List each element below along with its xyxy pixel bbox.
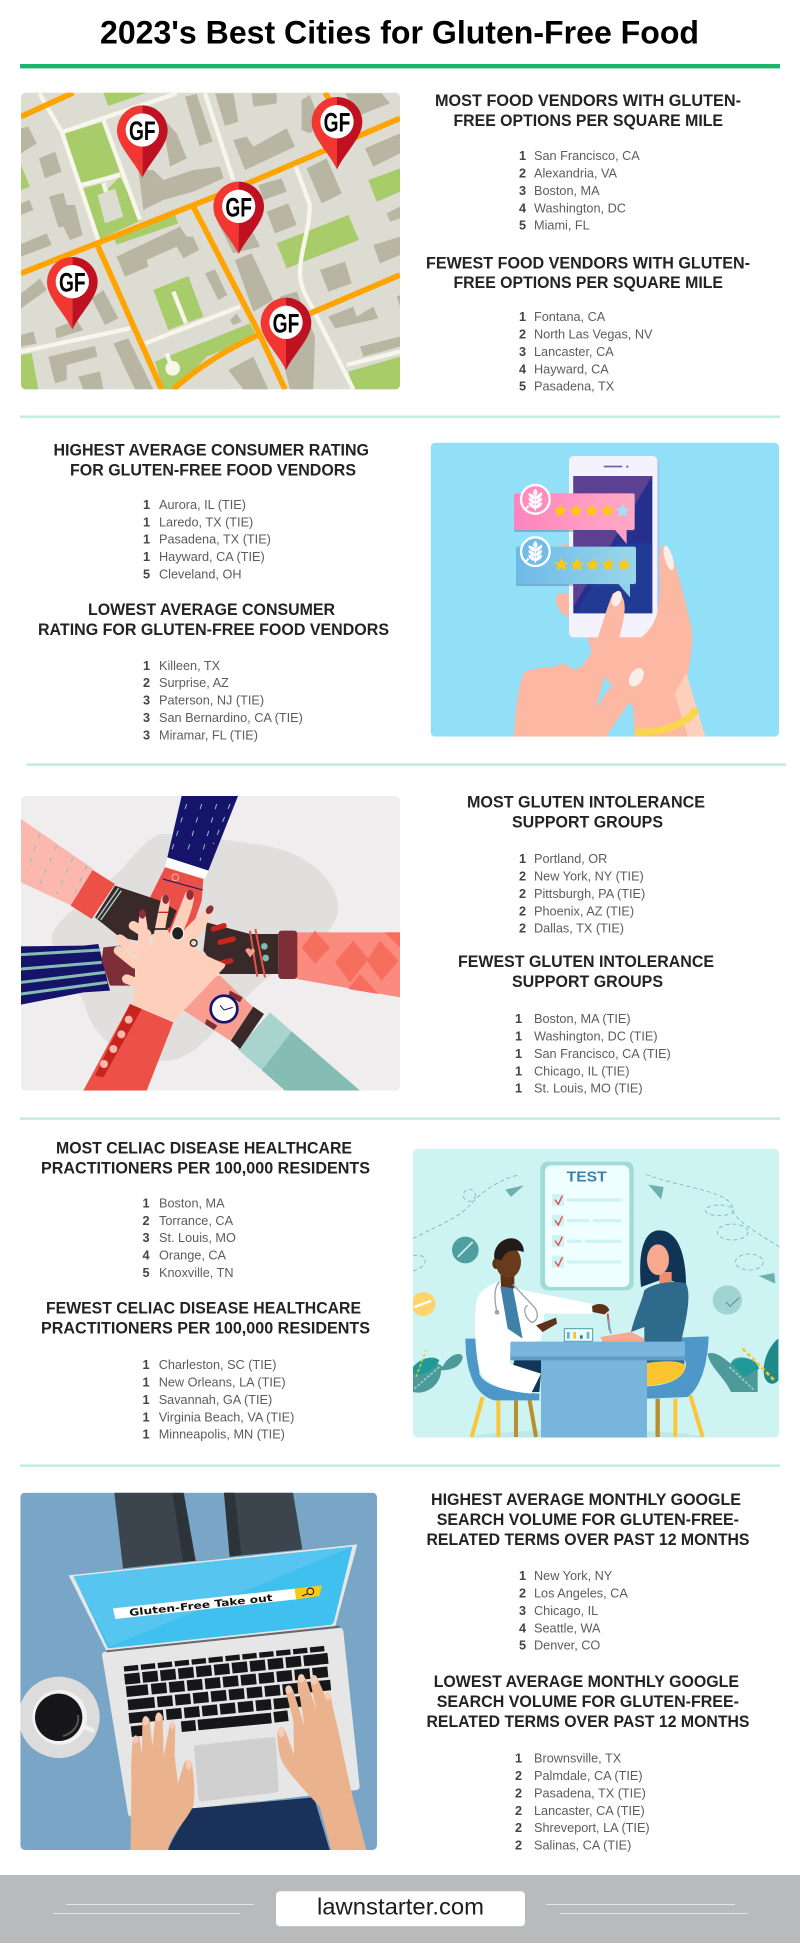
ranking list: 3 — [143, 711, 150, 725]
heading: RELATED TERMS OVER PAST 12 MONTHS — [426, 1531, 750, 1549]
ranking list: Brownsville, TX — [534, 1751, 622, 1765]
ranking list: Miramar, FL (TIE) — [159, 728, 258, 742]
ranking list: 2 — [515, 1769, 522, 1783]
arm: striped navy sleeve — [21, 944, 135, 1005]
heading — [54, 442, 369, 480]
ranking list: 2 — [515, 1838, 522, 1852]
footer logo box: lawnstarter.com — [317, 1894, 484, 1920]
pin 5 — [261, 298, 311, 370]
ranking list: Hayward, CA (TIE) — [159, 550, 265, 564]
ranking list: 1 — [143, 533, 150, 547]
review bubble: five stars — [516, 537, 636, 597]
search bar: Gluten-Free Take out — [129, 1593, 274, 1619]
panel: most vendors — [435, 92, 741, 232]
ranking list: 1 — [142, 1410, 150, 1424]
footer — [0, 1875, 800, 1943]
ranking list — [142, 1197, 236, 1280]
heading: RELATED TERMS OVER PAST 12 MONTHS — [426, 1713, 750, 1731]
heading: MOST FOOD VENDORS WITH GLUTEN- — [435, 92, 741, 110]
ranking list — [519, 1569, 628, 1652]
heading: MOST GLUTEN INTOLERANCE — [467, 793, 705, 811]
heading: PRACTITIONERS PER 100,000 RESIDENTS — [41, 1319, 370, 1337]
ranking list: Knoxville, TN — [159, 1266, 234, 1280]
ranking list: Washington, DC (TIE) — [534, 1029, 658, 1043]
ranking list: 3 — [519, 184, 526, 198]
heading: FOR GLUTEN-FREE FOOD VENDORS — [70, 462, 356, 480]
ranking list: 2 — [143, 676, 150, 690]
arm: pink sleeve — [21, 819, 177, 941]
ranking list: Cleveland, OH — [159, 567, 242, 581]
ranking list: 1 — [143, 498, 150, 512]
ranking list: 1 — [519, 852, 526, 866]
heading — [458, 953, 714, 991]
chair right — [647, 1336, 709, 1437]
ranking list: 1 — [515, 1047, 522, 1061]
ranking list: 4 — [519, 201, 526, 215]
ranking list: Fontana, CA — [534, 310, 606, 324]
pin 3: GF — [225, 192, 252, 222]
ranking list: Hayward, CA — [534, 362, 609, 376]
ranking list: Phoenix, AZ (TIE) — [534, 904, 634, 918]
ranking list: Lancaster, CA — [534, 345, 614, 359]
ranking list: Denver, CO — [534, 1638, 600, 1652]
ranking list: Miami, FL — [534, 218, 590, 232]
heading: RATING FOR GLUTEN-FREE FOOD VENDORS — [38, 621, 389, 639]
ranking list: North Las Vegas, NV — [534, 328, 653, 342]
ranking list: 1 — [519, 149, 526, 163]
ranking list: 3 — [519, 345, 526, 359]
ranking list: 1 — [142, 1427, 150, 1441]
test clipboard — [540, 1162, 634, 1290]
illustration: city map with GF pins — [21, 92, 400, 390]
heading: SUPPORT GROUPS — [512, 813, 663, 831]
icon: check badge — [713, 1285, 742, 1315]
pin 4: GF — [59, 268, 86, 298]
pin 1: GF — [129, 116, 156, 146]
ranking list: Palmdale, CA (TIE) — [534, 1769, 643, 1783]
ranking list: Boston, MA (TIE) — [534, 1012, 631, 1026]
ranking list: Chicago, IL (TIE) — [534, 1064, 629, 1078]
keyboard — [124, 1648, 331, 1732]
ranking list — [519, 852, 645, 936]
panel: highest rating — [54, 442, 369, 581]
ranking list: San Francisco, CA (TIE) — [534, 1047, 671, 1061]
ranking list: Killeen, TX — [159, 659, 221, 673]
holding hand — [587, 545, 705, 737]
ranking list: Salinas, CA (TIE) — [534, 1838, 631, 1852]
ranking list: 2 — [515, 1804, 522, 1818]
title: 2023's Best Cities for Gluten-Free Food — [100, 14, 699, 50]
heading: FREE OPTIONS PER SQUARE MILE — [454, 112, 723, 130]
ranking list: 1 — [143, 659, 150, 673]
ranking list: Shreveport, LA (TIE) — [534, 1821, 650, 1835]
ranking list: 2 — [519, 869, 526, 883]
ranking list: Dallas, TX (TIE) — [534, 922, 624, 936]
ranking list: 1 — [143, 550, 150, 564]
ranking list: Seattle, WA — [534, 1621, 601, 1635]
heading: HIGHEST AVERAGE CONSUMER RATING — [54, 442, 369, 460]
arm: teal sleeve with watch — [182, 976, 360, 1091]
panel: most support groups — [467, 793, 705, 936]
heading: HIGHEST AVERAGE MONTHLY GOOGLE — [431, 1491, 741, 1509]
ranking list: 5 — [143, 567, 150, 581]
ranking list: Washington, DC — [534, 201, 626, 215]
ranking list: Aurora, IL (TIE) — [159, 498, 246, 512]
ranking list: 3 — [143, 728, 150, 742]
arm: salmon sleeve — [203, 922, 400, 997]
heading: SEARCH VOLUME FOR GLUTEN-FREE- — [437, 1693, 739, 1711]
ranking list — [515, 1751, 650, 1852]
heading — [38, 601, 389, 639]
heading: FEWEST GLUTEN INTOLERANCE — [458, 953, 714, 971]
plants — [413, 1339, 778, 1393]
ranking list: 1 — [515, 1029, 522, 1043]
heading: FEWEST FOOD VENDORS WITH GLUTEN- — [426, 254, 750, 272]
heading: PRACTITIONERS PER 100,000 RESIDENTS — [41, 1159, 370, 1177]
ranking list: 3 — [519, 1604, 526, 1618]
test clipboard: TEST — [567, 1170, 607, 1186]
pin 3 — [213, 182, 264, 254]
search bar — [113, 1585, 322, 1619]
ranking list: 2 — [519, 922, 526, 936]
ranking list: Laredo, TX (TIE) — [159, 515, 253, 529]
ranking list — [142, 1358, 294, 1441]
footer logo box — [276, 1891, 525, 1926]
ranking list: 2 — [519, 904, 526, 918]
ranking list: Pasadena, TX (TIE) — [159, 533, 271, 547]
ranking list: Portland, OR — [534, 852, 607, 866]
icon: yellow badge — [411, 1292, 435, 1316]
heading — [467, 793, 705, 831]
ranking list: 1 — [142, 1358, 150, 1372]
ranking list: Paterson, NJ (TIE) — [159, 694, 264, 708]
ranking list: 1 — [519, 310, 526, 324]
illustration: laptop search — [20, 1492, 377, 1850]
pointing hand — [514, 590, 647, 737]
ranking list: Savannah, GA (TIE) — [159, 1393, 272, 1407]
icon: teal badge — [452, 1237, 479, 1263]
panel: lowest search volume — [426, 1673, 750, 1852]
illustration: phone with star reviews — [430, 442, 779, 737]
left hand — [131, 1712, 194, 1850]
ranking list: 1 — [143, 515, 150, 529]
ranking list: 2 — [519, 1586, 526, 1600]
ranking list: 1 — [515, 1751, 522, 1765]
ranking list: San Francisco, CA — [534, 149, 640, 163]
ranking list: 2 — [515, 1821, 522, 1835]
ranking list — [519, 149, 640, 232]
laptop base — [105, 1631, 356, 1813]
arm: navy sleeve top — [148, 796, 238, 934]
phone — [569, 456, 660, 637]
heading — [41, 1300, 370, 1337]
ranking list: 5 — [142, 1266, 150, 1280]
ranking list: Pittsburgh, PA (TIE) — [534, 887, 645, 901]
ranking list: Alexandria, VA — [534, 166, 618, 180]
ranking list: Minneapolis, MN (TIE) — [159, 1427, 285, 1441]
ranking list: Boston, MA — [534, 184, 600, 198]
ranking list: Lancaster, CA (TIE) — [534, 1804, 645, 1818]
heading: FEWEST CELIAC DISEASE HEALTHCARE — [46, 1300, 361, 1318]
pin 5: GF — [273, 308, 299, 338]
heading: FREE OPTIONS PER SQUARE MILE — [454, 274, 723, 292]
heading — [41, 1139, 370, 1177]
ranking list: 2 — [142, 1214, 150, 1228]
ranking list: Torrance, CA — [159, 1214, 234, 1228]
lap — [168, 1797, 330, 1850]
ranking list: St. Louis, MO — [159, 1231, 236, 1245]
ranking list: 5 — [519, 380, 526, 394]
ranking list: 2 — [519, 887, 526, 901]
illustration: doctor and patient — [413, 1149, 780, 1438]
ranking list — [143, 498, 271, 581]
panel: most practitioners — [41, 1139, 370, 1280]
test tube rack — [564, 1329, 593, 1341]
ranking list: New York, NY (TIE) — [534, 869, 644, 883]
ranking list: 1 — [515, 1064, 522, 1078]
illustration: stacked hands — [21, 796, 400, 1091]
ranking list: San Bernardino, CA (TIE) — [159, 711, 303, 725]
ranking list: 2 — [519, 328, 526, 342]
ranking list: St. Louis, MO (TIE) — [534, 1081, 643, 1095]
heading: MOST CELIAC DISEASE HEALTHCARE — [56, 1139, 352, 1157]
ranking list: New Orleans, LA (TIE) — [159, 1375, 286, 1389]
heading: SUPPORT GROUPS — [512, 973, 663, 991]
ranking list: 1 — [142, 1393, 150, 1407]
heading — [426, 254, 750, 292]
ranking list: Charleston, SC (TIE) — [159, 1358, 276, 1372]
coffee cup — [18, 1677, 100, 1758]
arm: red sleeve and top hand — [83, 890, 225, 1091]
ranking list: Surprise, AZ — [159, 676, 229, 690]
panel: lowest rating — [38, 601, 389, 742]
ranking list: New York, NY — [534, 1569, 613, 1583]
title rule — [20, 64, 780, 68]
ranking list: 3 — [142, 1231, 150, 1245]
ranking list: Orange, CA — [159, 1249, 227, 1263]
ranking list: Los Angeles, CA — [534, 1586, 628, 1600]
ranking list: 4 — [142, 1249, 150, 1263]
pin 4 — [47, 257, 98, 329]
ranking list: 1 — [142, 1375, 150, 1389]
heading — [426, 1491, 750, 1549]
ranking list: Pasadena, TX (TIE) — [534, 1786, 646, 1800]
patient — [600, 1230, 688, 1386]
ranking list: Chicago, IL — [534, 1604, 598, 1618]
ranking list: 4 — [519, 362, 526, 376]
heading: LOWEST AVERAGE CONSUMER — [88, 601, 335, 619]
ranking list — [143, 659, 303, 742]
ranking list: Pasadena, TX — [534, 380, 615, 394]
right hand — [277, 1674, 366, 1850]
heading — [426, 1673, 750, 1731]
heading: SEARCH VOLUME FOR GLUTEN-FREE- — [437, 1511, 739, 1529]
ranking list — [515, 1012, 671, 1095]
legs — [114, 1493, 302, 1568]
panel: fewest support groups — [458, 953, 714, 1095]
ranking list: 3 — [143, 694, 150, 708]
table — [510, 1342, 685, 1438]
panel: fewest practitioners — [41, 1300, 370, 1441]
ranking list: 2 — [515, 1786, 522, 1800]
pin 2 — [312, 97, 362, 169]
heading: LOWEST AVERAGE MONTHLY GOOGLE — [434, 1673, 739, 1691]
ranking list: 5 — [519, 218, 526, 232]
ranking list — [519, 310, 653, 394]
ranking list: Boston, MA — [159, 1197, 225, 1211]
heading — [435, 92, 741, 130]
panel: highest search volume — [426, 1491, 750, 1652]
doctor — [475, 1238, 611, 1394]
chair left — [465, 1339, 539, 1437]
ranking list: 1 — [515, 1081, 522, 1095]
ranking list: Virginia Beach, VA (TIE) — [159, 1410, 294, 1424]
pin 2: GF — [324, 108, 350, 138]
ranking list: 2 — [519, 166, 526, 180]
ranking list: 4 — [519, 1621, 526, 1635]
ranking list: 1 — [519, 1569, 526, 1583]
pin 1 — [117, 105, 168, 178]
ranking list: 1 — [515, 1012, 522, 1026]
laptop screen — [69, 1544, 357, 1651]
ranking list: 1 — [142, 1197, 150, 1211]
ranking list: 5 — [519, 1638, 526, 1652]
review bubble: four stars — [514, 485, 635, 544]
panel: fewest vendors — [426, 254, 750, 394]
